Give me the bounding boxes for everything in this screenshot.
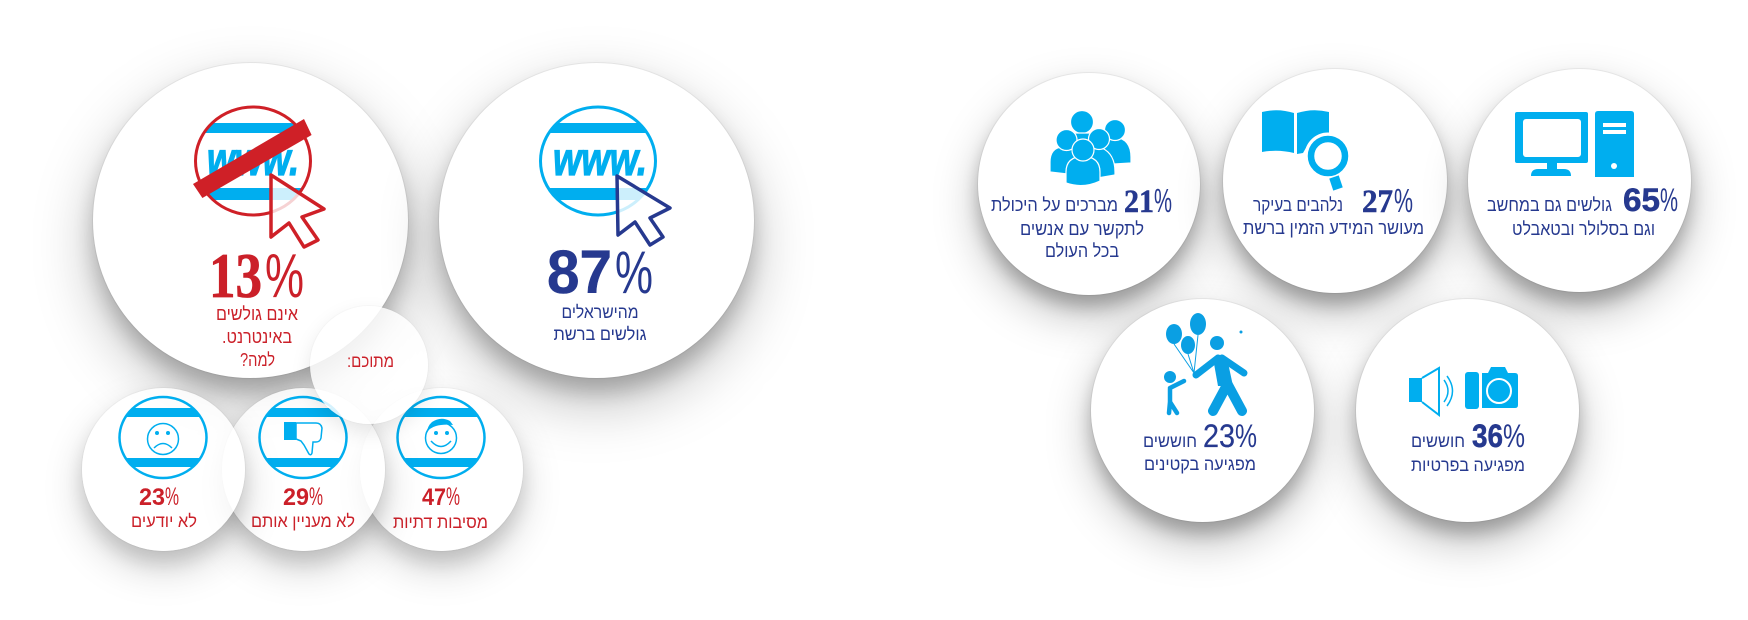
stat: 13%: 13: [209, 241, 262, 311]
text: religious reasons: מסיבות דתיות: [393, 512, 488, 532]
text: do not surf, why: [216, 304, 299, 370]
stat: 29%: 29: [283, 484, 309, 511]
text: of Israelis surf: גולשים ברשת: [554, 324, 646, 344]
stat: 29%: %: [309, 483, 323, 511]
panel: 23% minors fears: [1091, 299, 1314, 522]
stat: 47%: [422, 483, 460, 511]
text: of Israelis surf: [554, 302, 646, 344]
stat: 36%: 36: [1472, 418, 1503, 454]
stat: 27%: [1362, 182, 1413, 220]
stat: 36%: %: [1503, 418, 1525, 454]
panel: 65% computer, mobile, tablet: [1468, 69, 1691, 292]
icon: group of people: [1050, 110, 1131, 186]
panel: 13% do not surf: [93, 63, 408, 378]
stat: 29%: [283, 483, 323, 511]
stat: 23%: %: [165, 483, 179, 511]
text: fear of privacy harm: [1411, 431, 1525, 475]
text: do not surf, why: באינטרנט.: [222, 327, 292, 347]
panel: 47% religious reasons: [360, 388, 523, 551]
icon: www globe with cursor: www.: [553, 133, 647, 185]
icon: book and magnifier: [1262, 110, 1346, 189]
text: connect with people worldwide: בכל העולם: [1045, 241, 1119, 261]
stat: 27%: %: [1394, 182, 1413, 219]
icon: www globe with cursor: [535, 107, 670, 245]
text: of them: מתוכם:: [347, 351, 394, 371]
icon: man, child and balloons: [1164, 313, 1244, 413]
panel: 36% privacy fears: [1356, 299, 1579, 522]
stat: 87%: %: [615, 239, 653, 306]
stat: 13%: %: [265, 242, 304, 311]
text: fear of privacy harm: מפגיעה בפרטיות: [1411, 455, 1525, 475]
text: do not know: לא יודעים: [131, 511, 197, 531]
text: connect with people worldwide: מברכים על היכולת: [991, 195, 1118, 215]
stat: 23%: [139, 483, 179, 511]
text: fear of privacy harm: חוששים: [1411, 431, 1465, 451]
stat: 23%: [1203, 418, 1257, 454]
stat: 23%: 23: [1203, 418, 1235, 454]
stat: 21%: %: [1154, 182, 1172, 219]
stat: 21%: 21: [1124, 184, 1154, 220]
panel: 21% connect with people: [978, 73, 1200, 295]
panel: 23% do not know: [82, 388, 245, 551]
text: computer, mobile and tablet: וגם בסלולר ובטאבלט: [1512, 219, 1655, 239]
panel: 87% surf: [439, 63, 754, 378]
icon: smiling face: [395, 397, 487, 478]
stat: 23%: %: [1235, 418, 1257, 454]
icon: desktop computer: [1515, 111, 1634, 177]
panel: of them: [310, 306, 428, 424]
text: connect with people worldwide: [991, 195, 1144, 261]
text: do not surf, why: אינם גולשים: [216, 304, 299, 324]
text: fear of harm to minors: מפגיעה בקטינים: [1144, 454, 1256, 474]
text: fear of harm to minors: חוששים: [1143, 431, 1197, 451]
stat: 23%: 23: [139, 484, 165, 511]
text: connect with people worldwide: לתקשר עם אנשים: [1020, 219, 1144, 239]
icon: crossed-out www globe with cursor: www.: [207, 133, 299, 185]
panel: 27% excited by info: [1223, 69, 1447, 293]
text: of Israelis surf: מהישראלים: [562, 302, 638, 322]
text: computer, mobile and tablet: [1487, 195, 1655, 239]
stat: 47%: 47: [422, 484, 446, 511]
stat: 65%: [1623, 182, 1678, 218]
stat: 87%: 87: [547, 238, 612, 306]
text: fear of harm to minors: [1143, 431, 1256, 474]
stat: 13%: [209, 241, 304, 311]
text: computer, mobile and tablet: גולשים גם במחשב: [1487, 195, 1612, 215]
stat: 36%: [1472, 418, 1525, 454]
icon: thumbs down: [257, 397, 349, 478]
text: do not surf, why: למה?: [240, 350, 275, 370]
panel: 29% not interested: [222, 388, 385, 551]
text: excited by info online: מעושר המידע הזמין ברשת: [1243, 218, 1424, 238]
icon: speaker and camera: [1409, 367, 1518, 415]
text: not interested: לא מעניין אותם: [251, 511, 355, 531]
text: excited by info online: נלהבים בעיקר: [1253, 195, 1343, 215]
stat: 87%: [547, 238, 653, 306]
icon: crossed-out www globe with cursor: [190, 107, 324, 247]
stat: 65%: 65: [1623, 182, 1660, 218]
stat: 21%: [1124, 182, 1172, 220]
stat: 27%: 27: [1362, 184, 1393, 220]
text: excited by info online: [1243, 195, 1424, 238]
icon: sad face: [117, 397, 209, 478]
stat: 47%: %: [446, 483, 460, 511]
stat: 65%: %: [1660, 182, 1678, 218]
